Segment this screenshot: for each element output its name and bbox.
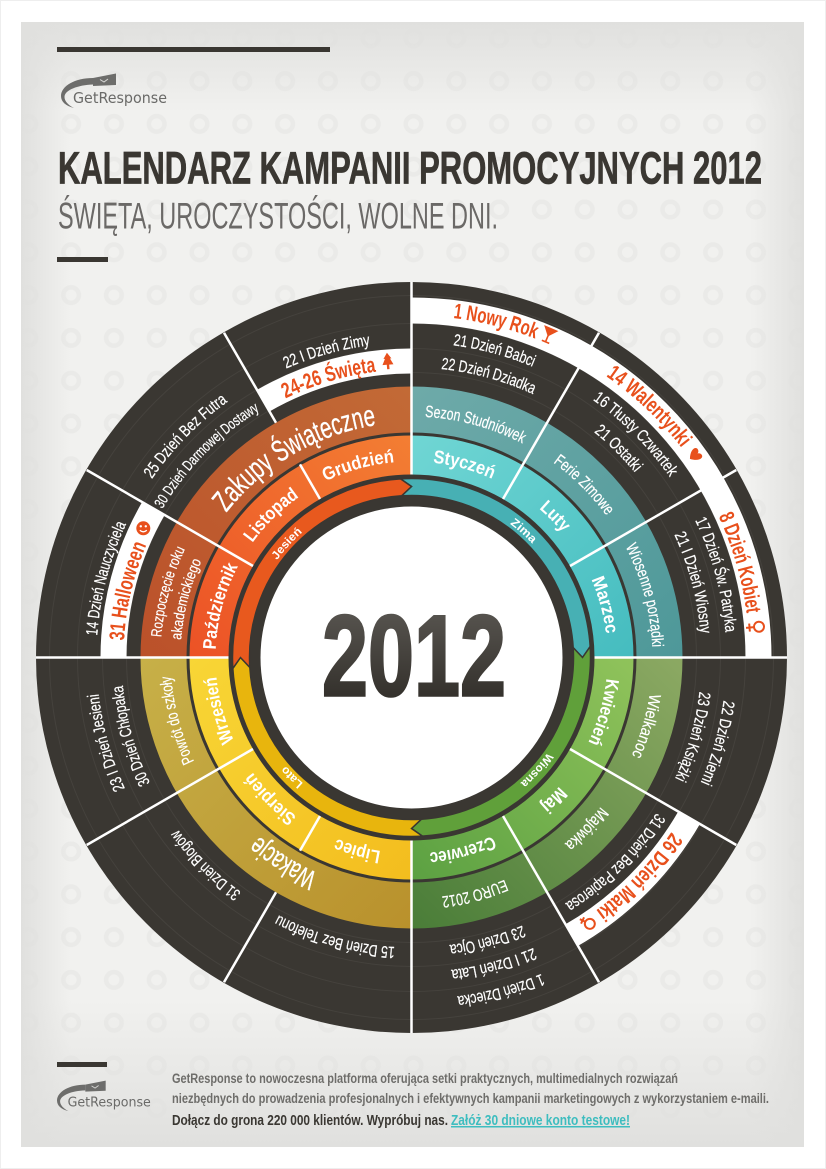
icon: heart [686, 447, 703, 464]
summer theme band [164, 658, 412, 906]
logo: GetResponse: GetResponse [73, 89, 167, 107]
event: 31 Dzień Bez Papierosa: 31 Dzień Bez Papierosa [565, 814, 665, 910]
theme: Wielkanoc: Wielkanoc [632, 696, 662, 758]
event: 22 Dzień Dziadka: 22 Dzień Dziadka [442, 358, 535, 394]
event: 17 Dzień Św. Patryka: 17 Dzień Św. Patryka [695, 517, 736, 632]
theme: Zakupy Świąteczne: Zakupy Świąteczne [197, 383, 387, 523]
logo: GetResponse [61, 74, 167, 108]
circular calendar [36, 282, 787, 1033]
event: 22 Dzień Ziemi: 22 Dzień Ziemi [700, 700, 735, 787]
subtitle: ŚWIĘTA, UROCZYSTOŚCI, WOLNE DNI. [58, 194, 498, 236]
event: 1 Dzień Dziecka: 1 Dzień Dziecka [457, 974, 544, 1007]
theme: Rozpoczęcie roku akademickiego: akademickiego [165, 555, 206, 643]
spring theme band [412, 658, 660, 906]
panel: winter quarter (Jan–Mar) [403, 298, 772, 656]
holiday: 24-26 Święta: 24-26 Święta [276, 348, 381, 404]
footer logo: GetResponse: GetResponse [68, 1095, 151, 1111]
season label: Lato: Lato [282, 767, 303, 789]
footer rule [57, 1062, 107, 1067]
panel: summer quarter (Jul–Sep) [86, 658, 423, 958]
season label: Jesień: Jesień [269, 525, 305, 563]
top rule [57, 47, 330, 52]
outer dark disc [36, 282, 787, 1033]
holiday: 8 Dzień Kobiet: 8 Dzień Kobiet [720, 512, 760, 614]
event: 23 Dzień Ojca: 23 Dzień Ojca [449, 926, 526, 955]
holiday band May [572, 818, 689, 935]
month: Listopad: Listopad [237, 481, 304, 547]
icon: female symbol [746, 621, 764, 633]
holiday: 26 Dzień Matki: 26 Dzień Matki [596, 832, 682, 922]
theme: Powrót do szkoły: Powrót do szkoły [160, 676, 194, 766]
month divider lines [36, 282, 787, 1033]
event: 25 Dzień Bez Futra: 25 Dzień Bez Futra [137, 387, 233, 484]
month: Sierpień: Sierpień [243, 773, 295, 825]
month: Grudzień: Grudzień [318, 442, 398, 486]
winter theme band [412, 410, 660, 658]
event: 31 Dzień Blogów: 31 Dzień Blogów [170, 830, 240, 900]
footer logo: GetResponse [57, 1081, 151, 1111]
event: 23 I Dzień Jesieni: 23 I Dzień Jesieni [86, 694, 125, 792]
summer season arrow [233, 658, 422, 837]
holiday band Jan–Mar [412, 310, 758, 658]
panel: autumn quarter (Oct–Dec) [86, 336, 413, 669]
event: 15 Dzień Bez Telefonu: 15 Dzień Bez Telefonu [275, 915, 394, 958]
autumn months ring [209, 455, 412, 658]
theme: Wiosenne porządki: Wiosenne porządki [626, 542, 664, 646]
theme: Wakacje: Wakacje [252, 838, 314, 891]
event: 21 I Dzień Lata: 21 I Dzień Lata [450, 948, 536, 980]
autumn theme band [164, 410, 412, 658]
event: 16 Tłusty Czwartek: 16 Tłusty Czwartek [593, 392, 678, 478]
holiday band October [114, 508, 153, 658]
spring season arrow [412, 647, 591, 836]
theme: Majówka: Majówka [564, 807, 609, 849]
event: 23 Dzień Książki: 23 Dzień Książki [675, 692, 711, 783]
theme: Sezon Studniówek: Sezon Studniówek [426, 406, 526, 444]
center circle with year [260, 506, 562, 808]
season label: Zima: Zima [510, 518, 536, 544]
month: Styczeń: Styczeń [434, 450, 496, 478]
footer text block [172, 1071, 769, 1129]
short rule [57, 257, 108, 262]
holiday: 14 Walentynki: 14 Walentynki [606, 366, 694, 447]
autumn season arrow [232, 479, 412, 668]
holiday: 1 Nowy Rok: 1 Nowy Rok [454, 304, 539, 339]
spring months ring [412, 658, 614, 860]
event: 30 Dzień Darmowej Dostawy: 30 Dzień Darmowej Dostawy [145, 393, 265, 514]
theme: Rozpoczęcie roku akademickiego: Rozpoczęcie roku [144, 542, 189, 640]
month: Kwiecień: Kwiecień [588, 679, 619, 746]
theme: EURO 2012: EURO 2012 [442, 880, 508, 908]
month: Luty: Luty [540, 500, 570, 531]
footer text block: GetResponse to nowoczesna platforma oferująca setki praktycznych, multimedialnych rozwiązań [172, 1071, 678, 1086]
month: Marzec: Marzec [592, 576, 616, 633]
theme: Rozpoczęcie roku akademickiego [151, 546, 201, 640]
icon: martini glass [540, 327, 557, 344]
icon: pumpkin [136, 521, 150, 535]
event: 30 Dzień Chłopaka: 30 Dzień Chłopaka [112, 685, 150, 787]
panel: spring quarter (Apr–Jun) [412, 646, 735, 1007]
month: Październik: Październik [194, 557, 243, 654]
event: 22 I Dzień Zimy: 22 I Dzień Zimy [280, 328, 374, 373]
month: Czerwiec: Czerwiec [430, 838, 496, 864]
month: Maj: Maj [540, 787, 568, 814]
theme: Ferie Zimowe: Ferie Zimowe [554, 454, 612, 514]
month: Lipiec: Lipiec [334, 840, 380, 864]
winter season arrow [401, 478, 590, 658]
winter months ring [412, 455, 614, 658]
month: Wrzesień: Wrzesień [203, 678, 233, 746]
footer text block: Załóż 30 dniowe konto testowe! [451, 1112, 630, 1129]
footer text block: Dołącz do grona 220 000 klientów. Wypróbuj nas. [172, 1112, 448, 1129]
summer months ring [209, 658, 412, 860]
season label: Wiosna: Wiosna [520, 754, 554, 786]
holiday: 31 Halloween: 31 Halloween [101, 537, 152, 645]
holiday band December [263, 361, 412, 401]
center circle with year: 2012 [322, 592, 506, 720]
event: 21 I Dzień Wiosny: 21 I Dzień Wiosny [674, 531, 710, 633]
event: 21 Dzień Babci: 21 Dzień Babci [454, 334, 536, 367]
icon: christmas tree [381, 352, 394, 370]
icon: mother symbol [578, 915, 596, 930]
event: 14 Dzień Nauczyciela: 14 Dzień Nauczyciela [78, 516, 131, 639]
event: 21 Ostatki: 21 Ostatki [594, 424, 644, 472]
